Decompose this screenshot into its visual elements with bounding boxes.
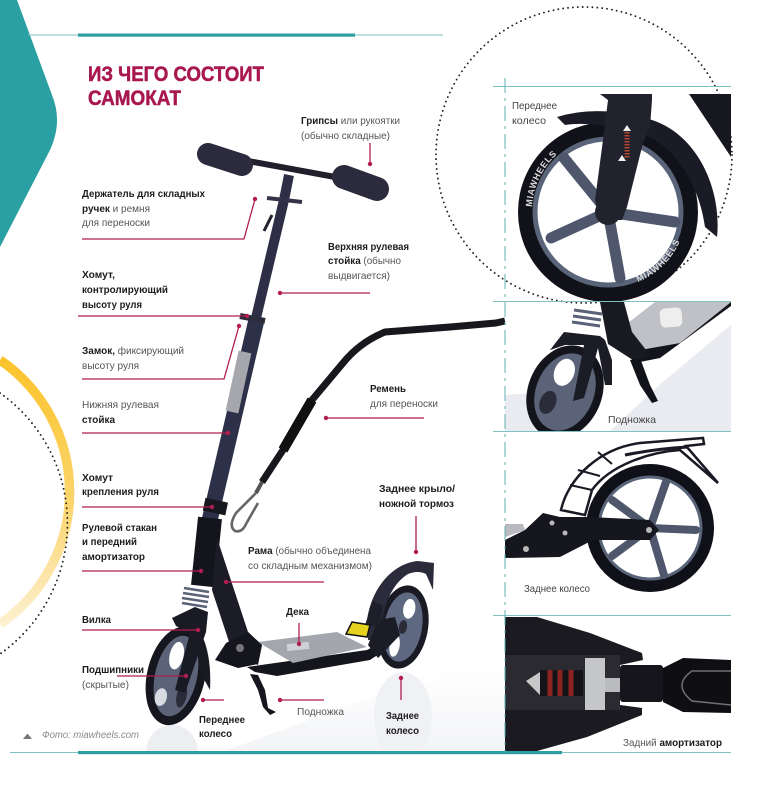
- shock mount: [585, 658, 605, 710]
- handlebar bar: [248, 161, 335, 177]
- label: lock: Замок, фиксирующий: [82, 345, 184, 357]
- label: lock: высоту руля: [82, 360, 139, 372]
- label: kickstand: [278, 698, 344, 718]
- label: lower stem: стойка: [82, 414, 115, 426]
- top rule: [28, 34, 443, 37]
- label: fork: [82, 614, 200, 632]
- label: height clamp: [78, 269, 249, 318]
- caption: front wheel: [512, 100, 557, 127]
- label: bar clamp: Хомут: [82, 472, 113, 484]
- link: [620, 665, 663, 702]
- rear fender: [367, 561, 434, 640]
- fork detail: [595, 94, 652, 220]
- fork: [172, 607, 208, 693]
- front wheel detail: [518, 122, 698, 302]
- kickstand: [250, 674, 276, 715]
- scooter: [136, 154, 435, 731]
- left grip: [208, 154, 242, 165]
- label: head tube: [82, 522, 203, 573]
- label: rear wheel: колесо: [386, 725, 419, 737]
- shock spring: [526, 670, 583, 696]
- deck edge: [640, 302, 731, 362]
- frame close-up: [600, 302, 646, 360]
- dotted arc left: [0, 393, 67, 654]
- title: ИЗ ЧЕГО СОСТОИТ: [88, 63, 264, 86]
- upper stem: [256, 175, 289, 318]
- label: front wheel: колесо: [199, 728, 232, 740]
- label: lower stem: [82, 399, 230, 435]
- suspension emblem: [618, 125, 631, 161]
- label: grips: Грипсы или рукоятки: [301, 115, 400, 127]
- photo credit: Фото: miawheels.com: [42, 729, 139, 741]
- panel rules: [493, 86, 731, 616]
- label: bearings: Подшипники: [82, 664, 144, 676]
- dotted circle right: [436, 7, 732, 303]
- tyre lettering: MIAWHEELS: [526, 151, 556, 206]
- label: frame: Рама (обычно объединена: [248, 545, 371, 557]
- label: bar clamp: крепления руля: [82, 486, 159, 498]
- label: rear fender: Заднее крыло/: [379, 483, 455, 495]
- rear wheel: [371, 581, 435, 673]
- panel: kickstand: [505, 302, 731, 431]
- pale floor: [505, 325, 731, 431]
- head tube: [203, 518, 210, 586]
- label: front wheel: [199, 698, 245, 740]
- label: deck: Дека: [286, 606, 309, 618]
- caption: Подножка: [608, 414, 656, 426]
- arm bolts: [523, 520, 652, 552]
- label: head tube: Рулевой стакан: [82, 522, 157, 534]
- kickstand close-up: [630, 358, 658, 403]
- wheel close-up: [526, 345, 604, 431]
- rear wheel close-up: [586, 464, 714, 592]
- title: [88, 63, 264, 110]
- label: front wheel: Переднее: [199, 714, 245, 726]
- rear fender close-up: [561, 438, 718, 515]
- rear bracket: [368, 617, 400, 658]
- label: grips: [301, 115, 400, 166]
- deck top: [258, 632, 367, 663]
- piston: [605, 678, 620, 692]
- label: head tube: и передний: [82, 536, 137, 548]
- panel: front wheel: [518, 94, 731, 301]
- rear tube: [663, 658, 731, 713]
- label: deck: [286, 606, 309, 646]
- label: bearings: (скрытые): [82, 679, 129, 691]
- tyre lettering: [526, 151, 679, 282]
- label: bar clamp: [82, 472, 214, 509]
- label: rear wheel: [386, 676, 419, 737]
- teal corner shape: [0, 0, 57, 247]
- label: fork: Вилка: [82, 614, 111, 626]
- silver stem section: [232, 352, 245, 412]
- label: strap: Ремень: [370, 383, 406, 395]
- caption: Заднее колесо: [524, 583, 590, 595]
- label: holder: ручек и ремня: [82, 203, 150, 215]
- label: holder: [82, 188, 257, 239]
- inner channel: [505, 655, 620, 710]
- label: strap: для переноски: [370, 398, 438, 410]
- right grip: [344, 177, 377, 189]
- label: rear fender: [379, 483, 455, 554]
- stem clamp: [203, 498, 228, 515]
- label: holder: Держатель для складных: [82, 188, 205, 200]
- warning sticker: [365, 601, 383, 627]
- label: height clamp: высоту руля: [82, 299, 142, 311]
- deck underside: [247, 640, 388, 676]
- label: rear wheel: Заднее: [386, 710, 419, 722]
- top-right frame fragment: [689, 94, 731, 157]
- deck body: [505, 617, 643, 751]
- fork close-up: [550, 332, 612, 401]
- floor reflections: [146, 672, 505, 751]
- swing arm: [505, 513, 659, 558]
- tube highlight: [682, 671, 731, 705]
- carry strap: [232, 321, 505, 531]
- label: upper stem: [278, 241, 409, 295]
- spring close-up: [572, 310, 602, 326]
- label: height clamp: Хомут,: [82, 269, 115, 281]
- label: strap: [324, 383, 438, 420]
- front wheel: [136, 621, 216, 731]
- label: upper stem: стойка (обычно: [328, 255, 401, 267]
- label: holder: для переноски: [82, 217, 150, 229]
- label: kickstand: Подножка: [297, 706, 344, 718]
- label: rear fender: ножной тормоз: [379, 498, 454, 510]
- label: upper stem: Верхняя рулевая: [328, 241, 409, 253]
- lower stem: [205, 322, 256, 540]
- label: head tube: амортизатор: [82, 551, 145, 563]
- fork spring: [182, 588, 209, 607]
- height clamp: [240, 316, 265, 321]
- upper clamp: [267, 198, 302, 202]
- yellow plate: [346, 622, 370, 637]
- label: frame: [224, 545, 372, 584]
- label: upper stem: выдвигается): [328, 270, 390, 282]
- label: bearings: [82, 664, 188, 691]
- deck end: [505, 524, 525, 537]
- label: grips: (обычно складные): [301, 130, 390, 142]
- panel: rear wheel: [505, 438, 718, 595]
- label: height clamp: контролирующий: [82, 284, 168, 296]
- folding lever: [264, 215, 272, 231]
- title: САМОКАТ: [88, 87, 181, 110]
- label: lock: [82, 324, 241, 379]
- caption: front wheel: Переднее: [512, 100, 557, 112]
- deck close-up: [628, 302, 731, 350]
- frame pivot: [215, 632, 262, 668]
- label: frame: со складным механизмом): [248, 560, 372, 572]
- front fender detail: [557, 111, 718, 237]
- frame: [212, 538, 262, 665]
- bottom rule: [10, 751, 731, 754]
- caption: rear shock: Задний амортизатор: [623, 737, 722, 749]
- deck logo: [659, 307, 683, 328]
- caption: front wheel: колесо: [512, 115, 546, 127]
- tyre lettering: MIAWHEELS: [636, 240, 679, 282]
- panel: rear shock: [505, 617, 731, 751]
- front fender: [197, 628, 210, 690]
- yellow arc: [0, 360, 70, 624]
- label: lower stem: Нижняя рулевая: [82, 399, 159, 411]
